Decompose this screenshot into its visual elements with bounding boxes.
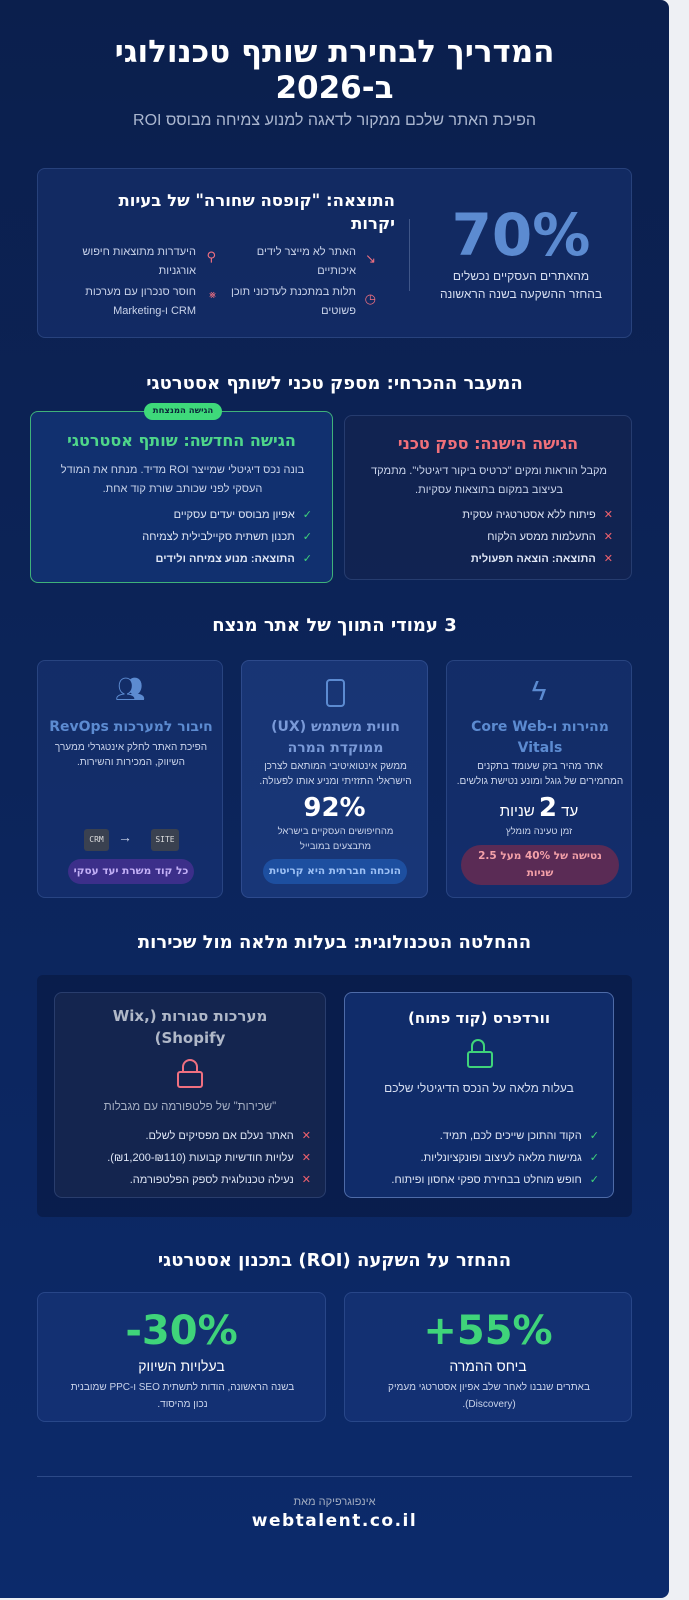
stat: 70% xyxy=(440,201,602,301)
panel: old approach: ✕פיתוח ללא אסטרטגיה עסקית xyxy=(462,509,613,521)
card: wordpress: ✓גמישות מלאה לעיצוב ופונקציונליות. xyxy=(421,1152,599,1164)
diagram: CRM to SITE: CRM xyxy=(89,835,104,844)
panel: old approach: ✕התוצאה: הוצאה תפעולית xyxy=(471,553,613,565)
problems list: ◷ xyxy=(365,291,376,306)
panel: RevOps pillar: הפיכת האתר לחלק אינטגרלי ממערך השיווק, המכירות והשירות. xyxy=(55,742,207,768)
title xyxy=(115,34,554,106)
panel: speed pillar: עד 2 שניות xyxy=(500,793,578,823)
badge: הגישה המנצחת xyxy=(153,406,213,416)
heading: black box xyxy=(118,191,395,233)
card: closed systems: מערכות סגורות (,Wix xyxy=(113,1007,267,1025)
problems list: האתר לא מייצר לידים איכותיים xyxy=(257,246,356,277)
section heading: 3 pillars: 3 עמודי התווך של אתר מנצח xyxy=(212,615,457,636)
panel: UX pillar: מהחיפושים העסקיים בישראל מתבצעים במובייל xyxy=(278,826,393,852)
card: wordpress: בעלות מלאה על הנכס הדיגיטלי שלכם xyxy=(384,1081,574,1095)
panel: new approach: ✓התוצאה: מנוע צמיחה ולידים xyxy=(156,553,312,565)
panel: RevOps pillar: כל קוד משרת יעד עסקי xyxy=(74,865,188,877)
icon: people: 👥︎ xyxy=(115,676,145,703)
section heading: ROI: ההחזר על השקעה (ROI) בתכנון אסטרטגי xyxy=(158,1250,511,1271)
problems list: היעדרות מתוצאות חיפוש אורגניות xyxy=(82,246,196,277)
stat: 70%: 70% xyxy=(452,201,590,269)
diagram: CRM to SITE: → xyxy=(118,829,132,845)
footer xyxy=(252,1496,417,1531)
icon: closed lock xyxy=(177,1059,203,1088)
heading: black box: התוצאה: "קופסה שחורה" של בעיות xyxy=(118,191,395,210)
panel: ROI marketing cost: בשנה הראשונה, הודות לתשתית SEO ו-PPC שמובנית נכון מהיסוד. xyxy=(71,1382,294,1410)
diagram: CRM to SITE xyxy=(84,829,179,851)
icon: open lock xyxy=(467,1039,493,1068)
stat: 70%: בהחזר ההשקעה בשנה הראשונה xyxy=(440,287,602,301)
section heading: transition: המעבר ההכרחי: מספק טכני לשותף אסטרטגי xyxy=(146,373,523,394)
problems list: ⚲ xyxy=(206,249,216,264)
diagram: CRM to SITE: SITE xyxy=(155,835,175,844)
panel: ROI conversion xyxy=(344,1292,632,1422)
icon: phone xyxy=(326,679,345,707)
card: wordpress: ✓הקוד והתוכן שייכים לכם, תמיד. xyxy=(440,1130,599,1142)
section heading: ownership vs rental: ההחלטה הטכנולוגית: בעלות מלאה מול שכירות xyxy=(138,932,531,953)
panel: old approach: הגישה הישנה: ספק טכני xyxy=(398,434,578,453)
card: closed systems xyxy=(54,992,326,1198)
panel: old approach: ✕התעלמות ממסע הלקוח xyxy=(487,531,613,543)
badge xyxy=(144,403,222,420)
panel: ROI conversion: +55% xyxy=(423,1308,553,1354)
panel: speed pillar: נטישה של 40% מעל 2.5 שניות xyxy=(478,850,602,879)
problems list: ⨳ xyxy=(209,289,216,301)
panel: ROI marketing cost: בעלויות השיווק xyxy=(138,1358,225,1374)
card: closed systems: ✕האתר נעלם אם מפסיקים לשלם. xyxy=(146,1130,311,1142)
heading: black box: יקרות xyxy=(351,214,395,233)
panel: speed pillar xyxy=(446,660,632,898)
title: ב-2026 xyxy=(275,70,394,106)
card: wordpress: וורדפרס (קוד פתוח) xyxy=(408,1009,550,1027)
title: המדריך לבחירת שותף טכנולוגי xyxy=(115,34,554,70)
panel: ROI marketing cost: -30% xyxy=(125,1308,238,1354)
stat: 70%: מהאתרים העסקיים נכשלים xyxy=(453,269,589,283)
panel: speed pillar: מהירות ו-Core Web Vitals xyxy=(471,719,609,756)
panel: ROI conversion: באתרים שנבנו לאחר שלב אפיון אסטרטגי מעמיק (Discovery). xyxy=(388,1382,590,1410)
footer: אינפוגרפיקה מאת xyxy=(294,1496,375,1508)
panel: UX pillar xyxy=(241,660,428,898)
card: wordpress: ✓חופש מוחלט בבחירת ספקי אחסון ופיתוח. xyxy=(391,1174,599,1186)
panel: new approach: ✓אפיון מבוסס יעדים עסקיים xyxy=(174,509,312,521)
problems list: חוסר סנכרון עם מערכות CRM ו-Marketing xyxy=(85,286,196,317)
card: closed systems: ✕עלויות חודשיות קבועות (₪110-₪1,200). xyxy=(107,1152,311,1164)
panel: black box stats xyxy=(37,168,632,338)
panel: speed pillar: זמן טעינה מומלץ xyxy=(506,826,572,837)
panel: new approach xyxy=(30,411,333,583)
panel: old approach xyxy=(344,415,632,580)
footer: webtalent.co.il xyxy=(252,1511,417,1531)
panel: speed pillar: אתר מהיר בזק שעומד בתקנים המחמירים של גוגל ומונע נטישת גולשים. xyxy=(457,761,623,787)
panel: RevOps pillar xyxy=(37,660,223,898)
subtitle: הפיכת האתר שלכם ממקור לדאגה למנוע צמיחה מבוסס ROI xyxy=(133,112,536,129)
panel: UX pillar: ממשק אינטואיטיבי המותאם לצרכן הישראלי התזזיתי ומניע אותו לפעולה. xyxy=(259,761,412,787)
panel: new approach: הגישה החדשה: שותף אסטרטגי xyxy=(67,431,296,450)
panel: new approach: בונה נכס דיגיטלי שמייצר ROI מדיד. מנתח את המודל העסקי לפני שכותב שורת קוד אחת. xyxy=(61,464,304,495)
panel: UX pillar: חווית משתמש (UX) ממוקדת המרה xyxy=(271,719,400,756)
panel: new approach: ✓תכנון תשתית סקיילבילית לצמיחה xyxy=(142,531,312,543)
problems list: תלות במתכנת לעדכוני תוכן פשוטים xyxy=(231,286,356,317)
panel: comparison container xyxy=(37,975,632,1217)
panel: UX pillar: הוכחה חברתית היא קריטית xyxy=(269,865,401,877)
card: closed systems: ✕נעילה טכנולוגית לספק הפלטפורמה. xyxy=(130,1174,311,1186)
problems list: ↘ xyxy=(365,251,376,266)
icon: lightning: ϟ xyxy=(532,675,546,706)
card: closed systems: Shopify) xyxy=(155,1029,225,1047)
panel: old approach: מקבל הוראות ומקים "כרטיס ביקור דיגיטלי". מתמקד בעיצוב במקום בתוצאות עסקיות. xyxy=(371,465,607,496)
problems list xyxy=(82,246,376,317)
panel: UX pillar: 92% xyxy=(303,793,366,823)
card: wordpress xyxy=(344,992,614,1198)
panel: RevOps pillar: חיבור למערכות RevOps xyxy=(49,719,213,735)
card: closed systems: "שכירות" של פלטפורמה עם מגבלות xyxy=(104,1101,276,1113)
panel: ROI conversion: ביחס ההמרה xyxy=(449,1358,527,1374)
panel: ROI marketing cost xyxy=(37,1292,326,1422)
